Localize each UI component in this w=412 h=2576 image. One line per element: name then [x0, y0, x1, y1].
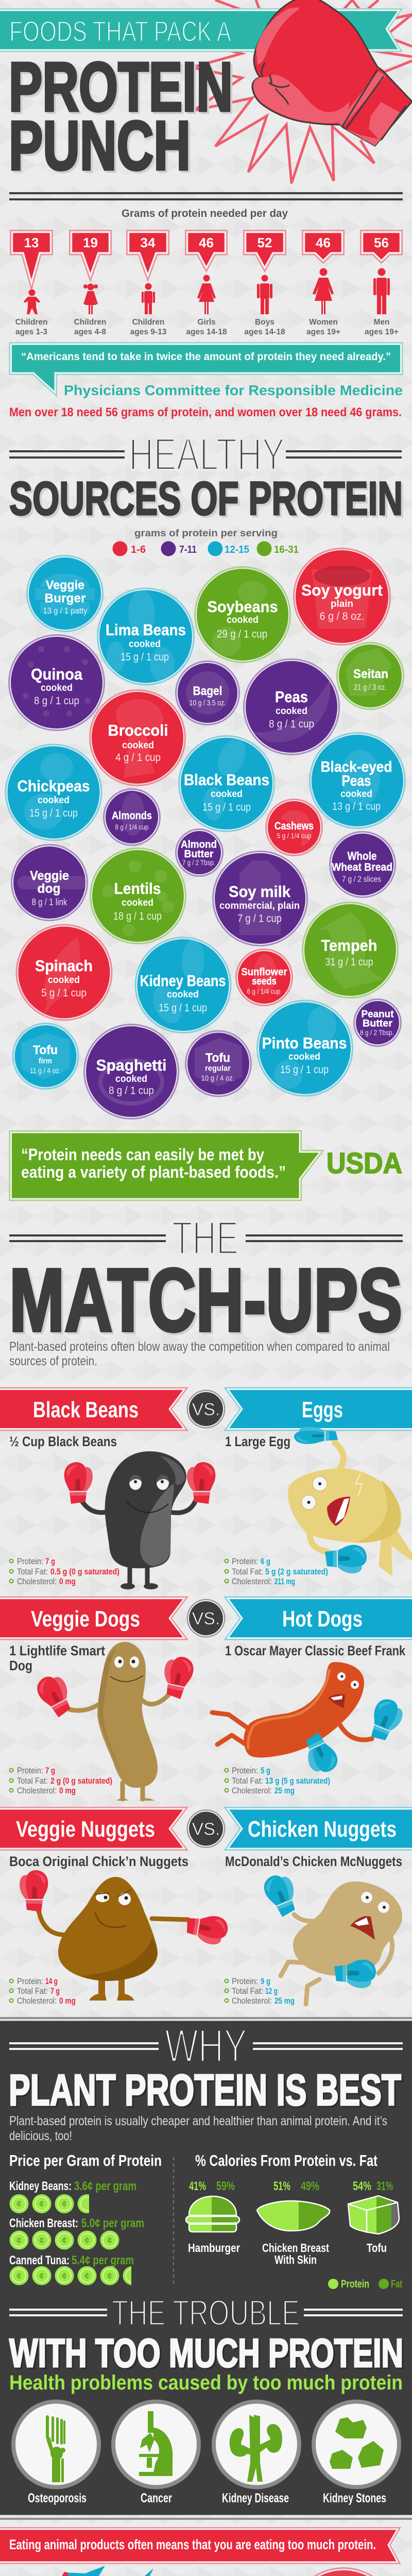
legend [112, 541, 299, 556]
title line: foods that pack a: FOODS THAT PACK A [9, 15, 231, 47]
heading: the trouble with too much protein: THE TROUBLE [112, 2293, 300, 2333]
stats: hot dog: Total Fat: [232, 1776, 263, 1786]
bubble: chickpeas: 15 g / 1 cup [29, 807, 78, 819]
bubble: veggie dog: dog [37, 882, 61, 896]
pin: girls: 46 [199, 235, 214, 250]
pin: children 1-3 [12, 232, 50, 283]
chart legend: Protein [341, 2278, 369, 2290]
title: protein punch [9, 48, 233, 184]
chart: calories from protein vs fat [186, 2179, 402, 2290]
matchup 1 header [0, 1389, 412, 1429]
icon: child [142, 283, 155, 314]
source: physicians committee: Physicians Committee for Responsible Medicine [64, 382, 403, 398]
stats: veggie dog: 7 g [45, 1766, 55, 1775]
heading: the trouble with too much protein [9, 2293, 403, 2376]
bubble: tofu regular [185, 1031, 251, 1096]
stats: hot dog: Cholesterol: [232, 1786, 272, 1795]
bubble: peanut butter: Peanut [362, 1009, 394, 1020]
icon: boxing glove [252, 0, 412, 146]
bubble: quinoa: 8 g / 1 cup [34, 695, 79, 707]
bubble: soybeans: cooked [227, 615, 259, 625]
bubble: spaghetti: 8 g / 1 cup [109, 1085, 154, 1096]
bubble: lentils [91, 848, 185, 944]
bubble: spinach: 5 g / 1 cup [41, 987, 87, 999]
health icon: kidney stones [314, 2402, 399, 2505]
callout: usda quote: eating a variety of plant-based foods.” [21, 1163, 286, 1181]
bubble: broccoli: Broccoli [108, 721, 168, 739]
pin: children 1-3: 13 [24, 235, 39, 250]
icon: man [373, 268, 390, 314]
character: egg [288, 1427, 412, 1577]
stats: veggie dog [9, 1766, 112, 1795]
heading: why plant protein is best [9, 2020, 403, 2115]
bubble: almond butter: 7 g / 2 Tbsp. [182, 858, 215, 867]
subheads matchup 2: 1 Lightlife Smart [9, 1643, 105, 1658]
bubble: soybeans [195, 567, 290, 663]
bubble: black beans [179, 734, 274, 832]
text: match-ups intro: sources of protein. [9, 1354, 97, 1368]
stats: veggie dog: Total Fat: [17, 1776, 48, 1786]
chart: calories from protein vs fat: Hamburger [188, 2241, 240, 2255]
subheads matchup 1: ½ Cup Black Beans [9, 1434, 117, 1449]
bubble: spinach [16, 925, 112, 1020]
chart: calories from protein vs fat: 49% [301, 2179, 319, 2193]
health icon: osteoporosis [13, 2402, 99, 2505]
bubble: almonds: 8 g / 1/4 cup [115, 823, 149, 831]
stats: black beans: Protein: [17, 1556, 43, 1566]
bubble: peas: 8 g / 1 cup [269, 718, 314, 730]
bubble: bagel: 10 g / 3.5 oz. [190, 699, 226, 707]
bubble: spinach: Spinach [35, 957, 93, 975]
pin: children 9-13: 34 [141, 235, 156, 250]
bubble: kidney beans: 15 g / 1 cup [159, 1002, 207, 1014]
bubble: spaghetti: cooked [115, 1074, 147, 1084]
health icon: cancer [113, 2402, 199, 2505]
health icon: kidney disease: Kidney Disease [222, 2491, 289, 2505]
bubble: soy yogurt: plain [331, 599, 353, 609]
subheads matchup 2 [9, 1643, 406, 1673]
bubble: almond butter [176, 829, 222, 876]
matchup 1 header: Black Beans [33, 1397, 139, 1422]
subheads matchup 2: Dog [9, 1658, 32, 1673]
matchup 2 header: VS. [192, 1609, 220, 1629]
panel: price per gram chart: Canned Tuna: [9, 2253, 70, 2267]
stats: eggs: Protein: [232, 1556, 258, 1566]
character: veggie dog [33, 1642, 196, 1801]
bubble: soy yogurt [294, 548, 390, 645]
stats: black beans: 0.5 g (0 g saturated) [50, 1567, 119, 1577]
stats: eggs: 211 mg [274, 1577, 295, 1586]
pin: boys: 52 [258, 235, 272, 250]
panel: dark section [0, 2017, 412, 2520]
bubble: lentils: 18 g / 1 cup [113, 910, 162, 922]
pin: children 4-8 [71, 232, 109, 276]
bubble: pinto beans: Pinto Beans [262, 1034, 347, 1052]
source: usda: USDA [327, 1147, 402, 1180]
stats: chicken nuggets: 12 g [265, 1986, 278, 1996]
icon: tofu [348, 2196, 399, 2234]
stats: veggie nuggets: Protein: [17, 1976, 43, 1986]
stats: chicken nuggets: Total Fat: [232, 1986, 263, 1996]
bubble: kidney beans: Kidney Beans [140, 972, 226, 990]
stats: chicken nuggets: 25 mg [274, 1996, 295, 2006]
stats: veggie dog: Protein: [17, 1766, 43, 1775]
age labels: Boys [255, 318, 274, 327]
bubble: tofu firm: Tofu [33, 1043, 58, 1057]
stats: black beans [9, 1556, 119, 1586]
bubble: almonds [104, 789, 160, 845]
bubble: lima beans: 15 g / 1 cup [121, 651, 169, 663]
bubble: black beans: Black Beans [184, 771, 269, 789]
legend: 7-11 [179, 544, 197, 555]
stat circles: +250% [251, 2568, 398, 2576]
matchup 1 header: VS. [192, 1400, 220, 1419]
chart legend: Fat [391, 2278, 402, 2290]
pin: men [363, 232, 401, 261]
bubble: lentils: Lentils [114, 879, 161, 897]
bubble: peanut butter [354, 999, 401, 1046]
matchup 2 header: Hot Dogs [282, 1606, 363, 1632]
icon: boy teen [257, 275, 272, 314]
bubble: tofu firm: 11 g / 4 oz. [30, 1066, 61, 1075]
bubble: kidney beans [135, 938, 231, 1032]
heading: grams of protein needed per day: Grams of protein needed per day [122, 208, 288, 219]
stats: veggie nuggets: 0 mg [59, 1996, 76, 2006]
bubble: lima beans: Lima Beans [106, 621, 186, 639]
age labels: ages 19+ [365, 328, 399, 336]
stats: veggie dog: Cholesterol: [17, 1786, 57, 1795]
bubble: whole wheat bread: 7 g / 2 slices [342, 875, 381, 884]
chart: calories from protein vs fat: Chicken Breast [262, 2241, 329, 2255]
health icon: kidney stones: Kidney Stones [323, 2491, 386, 2505]
subheads matchup 1 [9, 1434, 290, 1449]
panel: price per gram chart: 3.6¢ per gram [74, 2179, 136, 2193]
icon: girl teen [197, 275, 216, 314]
bubble: almonds: Almonds [112, 810, 152, 822]
bubble: tofu firm: firm [39, 1057, 52, 1065]
bubble: quinoa [9, 635, 104, 731]
bubble: pinto beans [258, 1001, 352, 1096]
chart: calories from protein vs fat: Tofu [367, 2241, 387, 2255]
text: match-ups intro [9, 1340, 390, 1368]
health icon: cancer: Cancer [141, 2491, 172, 2505]
age labels: ages 4-8 [74, 328, 106, 336]
bubble: peas [244, 659, 339, 754]
stats: black beans: 0 mg [59, 1577, 76, 1586]
stats: eggs [225, 1556, 328, 1586]
stats: hot dog: 13 g (5 g saturated) [265, 1776, 330, 1786]
chart: calories from protein vs fat: 41% [189, 2179, 206, 2193]
stats: veggie nuggets [9, 1976, 76, 2006]
bubble: broccoli: 4 g / 1 cup [115, 752, 161, 764]
callout: americans quote: “Americans tend to take in twice the amount of protein they need already.” [21, 351, 391, 363]
age labels: ages 9-13 [130, 328, 167, 336]
subheads matchup 3 [9, 1854, 402, 1869]
stats: hot dog: 25 mg [274, 1786, 295, 1795]
age labels: ages 14-18 [186, 328, 227, 336]
bubble: veggie burger: Burger [44, 591, 85, 605]
bubble: soy yogurt: Soy yogurt [301, 581, 383, 599]
title: protein punch: PUNCH [9, 107, 191, 184]
callout: usda quote [11, 1132, 320, 1199]
bubble: peas: Peas [275, 688, 308, 706]
pin: women: 46 [316, 235, 331, 250]
character: chicken nugget [261, 1870, 402, 2004]
pin: children 9-13 [129, 232, 167, 276]
bubble: veggie burger: 13 g / 1 patty [43, 606, 88, 616]
bubble: soy milk: Soy milk [229, 883, 291, 901]
age labels: ages 1-3 [15, 328, 47, 336]
panel: price per gram chart [9, 2179, 144, 2285]
bubble: tempeh: Tempeh [321, 937, 377, 954]
heading: the match-ups: THE [172, 1212, 238, 1264]
matchup 3 header: Veggie Nuggets [16, 1817, 155, 1842]
bubble: sunflower seeds: 6 g / 1/4 cup [247, 987, 281, 995]
stats: eggs: Cholesterol: [232, 1577, 272, 1586]
text: why intro: delicious, too! [9, 2129, 72, 2143]
subheads matchup 1: 1 Large Egg [225, 1434, 290, 1449]
bubble: tempeh [303, 903, 398, 997]
bubble: cashews: Cashews [274, 820, 314, 832]
heading: price per gram: Price per Gram of Protein [9, 2151, 162, 2170]
bubble: broccoli [90, 690, 185, 785]
bubble: broccoli: cooked [122, 740, 154, 751]
bubble: black beans: 15 g / 1 cup [202, 802, 251, 813]
callout: americans quote [11, 344, 401, 393]
stats: veggie nuggets: Cholesterol: [17, 1996, 57, 2006]
chart: calories from protein vs fat: 59% [216, 2179, 235, 2193]
stats: veggie dog: 2 g (0 g saturated) [50, 1776, 112, 1786]
heading: healthy sources of protein: HEALTHY [129, 429, 285, 480]
bubble: tofu regular: Tofu [205, 1051, 230, 1065]
bubble: bagel [176, 662, 239, 724]
stats: chicken nuggets: 9 g [261, 1976, 270, 1986]
chart: calories from protein vs fat: 51% [273, 2179, 290, 2193]
matchup 1 header: Eggs [302, 1397, 343, 1422]
age labels [15, 318, 399, 336]
bubble: black-eyed peas: Black-eyed [320, 759, 392, 775]
chart: calories from protein vs fat: 54% [353, 2179, 371, 2193]
character: veggie nugget [20, 1870, 230, 2001]
pin: men: 56 [374, 235, 389, 250]
title banner [0, 10, 399, 50]
bubble: soy milk: commercial, plain [219, 901, 300, 911]
bubble: sunflower seeds: Sunflower [241, 967, 287, 978]
icon: hamburger [186, 2196, 239, 2232]
stats: eggs: 6 g [261, 1556, 270, 1566]
stats: veggie nuggets: Total Fat: [17, 1986, 48, 1996]
icon: chicken breast [257, 2201, 330, 2231]
chart legend [328, 2278, 402, 2290]
bubble: cashews [266, 800, 322, 855]
panel: price per gram chart: Kidney Beans: [9, 2179, 72, 2193]
bubble: lima beans [98, 588, 194, 685]
chart: calories from protein vs fat: 31% [376, 2179, 393, 2193]
bubble: bagel: Bagel [193, 684, 222, 698]
bubble: chickpeas: cooked [38, 795, 70, 806]
bubble: quinoa: Quinoa [31, 665, 83, 683]
bubble: lima beans: cooked [129, 639, 161, 650]
text: why intro [9, 2114, 387, 2143]
bubble: whole wheat bread: Wheat Bread [332, 861, 392, 873]
bubble: tempeh: 31 g / 1 cup [325, 956, 373, 968]
stats: eggs: 5 g (2 g saturated) [265, 1567, 328, 1577]
stats: veggie dog: 0 mg [59, 1786, 76, 1795]
bubble: kidney beans: cooked [167, 989, 199, 1000]
age labels: Girls [197, 318, 216, 327]
age labels: ages 19+ [306, 328, 340, 336]
pin: girls [187, 232, 226, 268]
starburst behind glove [192, 0, 412, 183]
stats: veggie nuggets: 14 g [45, 1976, 58, 1986]
legend: 16-31 [274, 544, 299, 555]
age labels: ages 14-18 [244, 328, 285, 336]
panel: price per gram chart: 5.0¢ per gram [81, 2216, 144, 2230]
panel: price per gram chart: 5.4¢ per gram [72, 2253, 134, 2267]
bubble: black-eyed peas: 13 g / 1 cup [332, 801, 381, 812]
matchup 3 header: VS. [192, 1820, 220, 1839]
panel: price per gram chart: ¢¢¢ [16, 2199, 67, 2209]
heading: why plant protein is best: WHY [165, 2020, 247, 2072]
bubble: chickpeas: Chickpeas [18, 777, 90, 795]
character: black bean [64, 1451, 215, 1589]
bubble: sunflower seeds: seeds [252, 976, 277, 987]
legend heading: grams of protein per serving [134, 528, 278, 539]
stats: chicken nuggets: Protein: [232, 1976, 258, 1986]
stats: hot dog: 5 g [261, 1766, 270, 1775]
icon: girl [83, 283, 98, 314]
bubble: whole wheat bread: Whole [347, 850, 377, 862]
stats: black beans: Cholesterol: [17, 1577, 57, 1586]
pin: boys [245, 232, 284, 268]
stats: hot dog: Protein: [232, 1766, 258, 1775]
bubble: soy milk: 7 g / 1 cup [237, 913, 282, 924]
bubble: pinto beans: 15 g / 1 cup [280, 1064, 329, 1076]
bubble: spaghetti [84, 1024, 178, 1119]
bubble: pinto beans: cooked [288, 1052, 320, 1062]
stats: black beans: Total Fat: [17, 1567, 48, 1577]
bubble: tofu regular: 10 g / 4 oz. [201, 1074, 235, 1083]
health icon: osteoporosis: Osteoporosis [28, 2491, 87, 2505]
icon: woman [313, 268, 334, 314]
bubble: soy yogurt: 6 g / 8 oz. [319, 611, 365, 622]
title: protein punch: PROTEIN [9, 48, 233, 126]
bubble: lentils: cooked [122, 897, 153, 908]
panel: price per gram chart: Chicken Breast: [9, 2216, 78, 2230]
bubble: whole wheat bread [330, 832, 396, 897]
stats: chicken nuggets [225, 1976, 295, 2006]
heading: healthy sources of protein [9, 429, 403, 525]
bubble: black-eyed peas: cooked [340, 789, 372, 800]
age labels: Children [74, 318, 106, 327]
age labels: Children [15, 318, 47, 327]
pin: children 4-8: 19 [83, 235, 98, 250]
age labels: Children [132, 318, 164, 327]
age labels: Women [309, 318, 338, 327]
bubble: black beans: cooked [211, 789, 243, 800]
protein per day chart [12, 232, 401, 336]
bubble: black-eyed peas: Peas [342, 773, 371, 789]
stats: veggie nuggets: 7 g [50, 1986, 60, 1996]
age labels: Men [374, 318, 389, 327]
bubble: quinoa: cooked [41, 683, 73, 693]
bubble: peanut butter: Butter [363, 1018, 393, 1029]
icon: fish on scale [28, 2566, 153, 2576]
bubble: almond butter: Almond [181, 839, 217, 850]
divider [9, 192, 403, 194]
bubble: chickpeas [6, 744, 101, 840]
chart: calories from protein vs fat: With Skin [274, 2253, 317, 2266]
bubble: soybeans: Soybeans [207, 598, 278, 616]
bubble: seitan [337, 643, 404, 709]
bubble: seitan: Seitan [353, 667, 388, 681]
bubble: veggie dog [11, 845, 88, 920]
stats: chicken nuggets: Cholesterol: [232, 1996, 272, 2006]
bubble: spaghetti: Spaghetti [96, 1056, 167, 1074]
matchup 2 header [0, 1598, 412, 1638]
bubble: black-eyed peas [310, 733, 405, 828]
bubble: veggie dog: 8 g / 1 link [32, 897, 67, 907]
bubble: soy milk [213, 851, 307, 946]
bubble: veggie burger [27, 555, 103, 632]
callout: usda quote: “Protein needs can easily be met by [21, 1145, 264, 1164]
icon: baby [24, 290, 40, 314]
panel: price per gram chart: ¢¢¢¢¢ [16, 2235, 112, 2245]
bubble: cashews: 5 g / 1/4 cup [277, 832, 312, 840]
legend: 1-6 [131, 544, 146, 555]
matchup 2 header: Veggie Dogs [31, 1606, 140, 1632]
bubble: almond butter: Butter [184, 849, 214, 860]
character: hot dog [212, 1662, 407, 1778]
banner: eating animal products [0, 2529, 398, 2562]
bubble: tofu regular: regular [205, 1064, 231, 1073]
bubble: seitan: 21 g / 3 oz. [354, 683, 387, 692]
stats: eggs: Total Fat: [232, 1567, 263, 1577]
bubble: veggie dog: Veggie [30, 869, 69, 883]
panel: price per gram chart: ¢¢¢¢¢ [16, 2271, 112, 2281]
bubble: spinach: cooked [48, 975, 80, 986]
matchup 3 header [0, 1809, 412, 1849]
stats: hot dog [225, 1766, 330, 1795]
pin: women [304, 232, 342, 261]
bubble: soybeans: 29 g / 1 cup [217, 629, 267, 640]
stats: black beans: 7 g [45, 1556, 55, 1566]
bubble: sunflower seeds [236, 949, 293, 1006]
health icon: kidney disease [214, 2402, 299, 2505]
legend: 12-15 [225, 544, 249, 555]
bubble: peanut butter: 8 g / 2 Tbsp. [360, 1028, 394, 1037]
subheads matchup 3: Boca Original Chick’n Nuggets [9, 1854, 188, 1869]
bubble: tofu firm [13, 1023, 78, 1089]
bubble: peas: cooked [276, 706, 307, 717]
bubble: veggie burger: Veggie [46, 578, 84, 592]
